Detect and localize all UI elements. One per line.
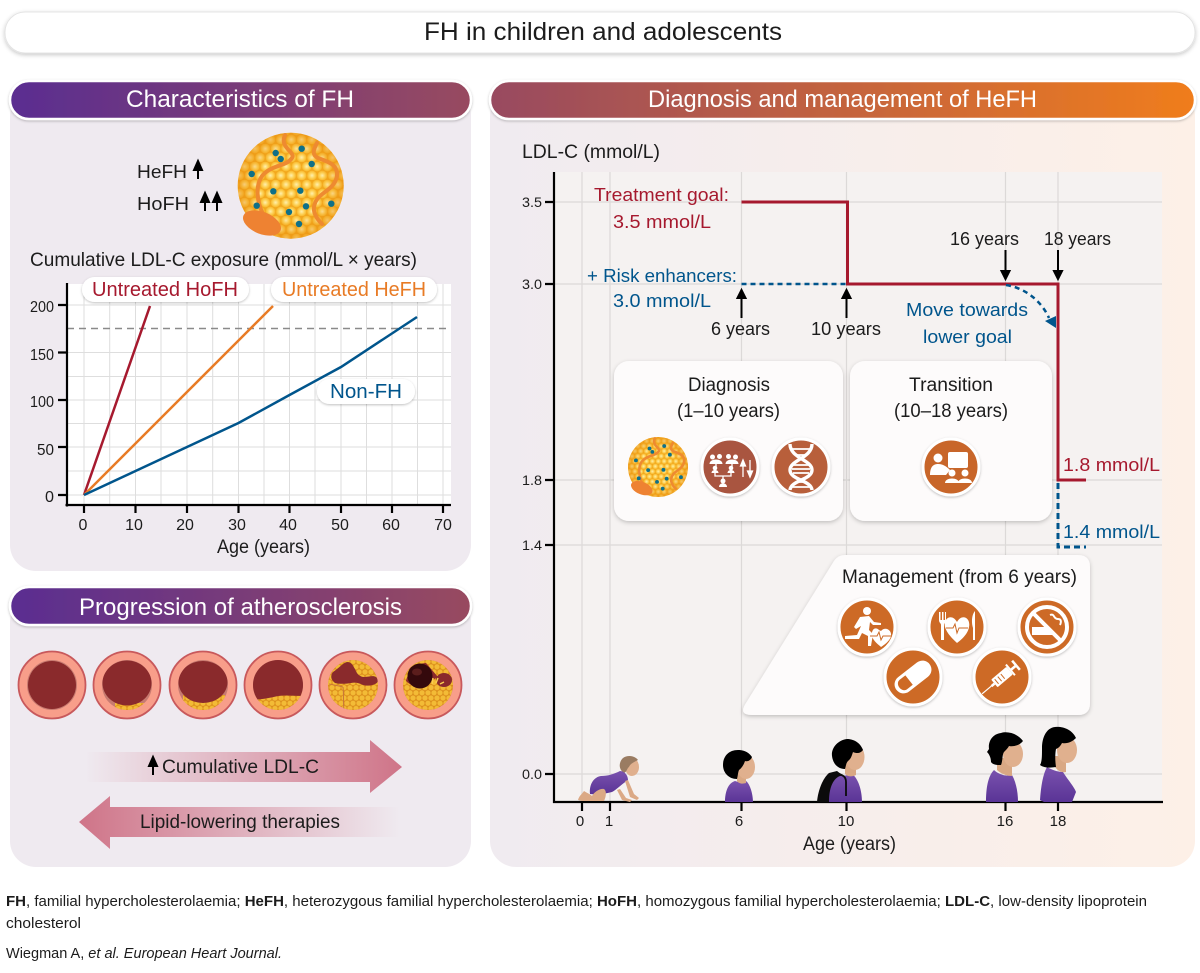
x axis labels: 50	[331, 517, 349, 534]
y axis labels: 50	[37, 442, 54, 459]
x axis labels: 60	[382, 517, 400, 534]
label: treatment goal: 3.5 mmol/L	[613, 211, 711, 232]
illustration: child with backpack, age 10	[817, 739, 864, 802]
panel: transition: (10–18 years)	[894, 401, 1008, 422]
panel: diagnosis: (1–10 years)	[677, 401, 780, 422]
label: non-FH	[317, 379, 415, 404]
label: risk enhancers: 3.0 mmol/L	[613, 290, 711, 311]
footnote: abbreviations: FH, familial hypercholesterolaemia; HeFH, heterozygous familial hypercholesterolaemia; HoFH, homozygous familial hypercholesterolaemia; LDL-C, low-density lipoprotein	[6, 894, 1147, 910]
icon: injection	[974, 649, 1030, 705]
heading: diagnosis and management of HeFH: Diagnosis and management of HeFH	[648, 86, 1037, 113]
chart: cumulative LDL-C exposure	[30, 249, 452, 558]
x axis labels: 10	[838, 813, 854, 830]
x axis labels: 1	[605, 813, 613, 830]
icon: family screening	[702, 439, 758, 495]
y axis labels: 1.8	[522, 472, 542, 488]
y axis title: LDL-C (mmol/L)	[522, 142, 660, 163]
age marker labels: 10 years	[811, 318, 881, 339]
arrows: age markers	[738, 250, 1062, 318]
panel: diagnosis: Diagnosis	[688, 375, 770, 396]
x axis labels: 16	[997, 813, 1013, 830]
label: move towards lower goal	[906, 299, 1028, 347]
y axis labels: 0	[45, 489, 54, 506]
y axis labels	[522, 194, 542, 782]
age marker labels: 6 years	[711, 318, 770, 339]
heading: characteristics of FH: Characteristics of FH	[126, 86, 354, 113]
chart: cumulative LDL-C exposure: Cumulative LDL-C exposure (mmol/L × years)	[30, 249, 417, 271]
label: treatment goal	[594, 184, 729, 232]
LDL-C levels by FH type: HeFH	[137, 161, 187, 182]
label: 1.8 mmol/L: 1.8 mmol/L	[1063, 454, 1160, 475]
x axis title: Age (years)	[803, 834, 896, 855]
footnote: abbreviations: cholesterol	[6, 916, 81, 932]
axes	[545, 172, 1163, 803]
y axis labels: 150	[30, 347, 54, 364]
icon: no smoking	[1019, 599, 1075, 655]
x axis labels: 30	[228, 517, 246, 534]
panel: management	[743, 555, 1090, 715]
panel: characteristics of FH	[10, 81, 471, 571]
y axis labels: 3.5	[522, 194, 542, 210]
line: untreated HoFH	[84, 306, 150, 495]
label: treatment goal: Treatment goal:	[594, 184, 729, 205]
arrow: cumulative LDL-C rising: Cumulative LDL-C	[162, 757, 319, 778]
panel: diagnosis	[614, 361, 843, 521]
icon: exercise	[839, 599, 895, 655]
panel: transition	[850, 361, 1052, 521]
illustration: baby, age 1	[578, 756, 639, 802]
line: lower goal	[1058, 483, 1086, 547]
age marker labels	[711, 228, 1111, 339]
label: non-FH: Non-FH	[330, 381, 402, 403]
panel: progression of atherosclerosis	[10, 587, 471, 867]
y axis labels: 1.4	[522, 537, 542, 553]
panel: management: Management (from 6 years)	[842, 567, 1077, 588]
heading: diagnosis and management of HeFH	[490, 81, 1195, 119]
line: risk enhancer goal	[742, 283, 846, 285]
title bar: FH in children and adolescents	[424, 18, 782, 46]
heading: characteristics of FH	[10, 81, 471, 119]
y axis labels: 100	[30, 394, 54, 411]
arrow: move towards lower goal	[1006, 285, 1056, 328]
x axis labels: 0	[576, 813, 584, 830]
panel: diagnosis and management of HeFH	[490, 81, 1195, 867]
x axis labels: 0	[79, 517, 88, 534]
label: risk enhancers	[587, 265, 737, 311]
x axis title: Age (years)	[217, 536, 310, 558]
footnote: abbreviations	[6, 894, 1147, 932]
artery stage 1	[18, 652, 86, 718]
label: untreated HeFH: Untreated HeFH	[282, 279, 426, 301]
heading: progression of atherosclerosis: Progression of atherosclerosis	[79, 594, 402, 621]
icon: healthy diet	[929, 599, 985, 655]
y axis labels	[30, 299, 54, 506]
x axis labels: 10	[125, 517, 143, 534]
illustration: young adult, age 18	[1040, 727, 1077, 802]
label: move towards lower goal: Move towards	[906, 299, 1028, 320]
artery stage 5	[320, 652, 386, 718]
artery stage 2	[94, 652, 160, 718]
icon: pill	[885, 649, 941, 705]
line: treatment goal	[742, 202, 1086, 480]
icon: LDL particle	[628, 437, 688, 498]
arrow: cumulative LDL-C rising	[85, 740, 402, 793]
artery stage 3	[170, 652, 236, 718]
axes	[58, 283, 451, 513]
LDL-C levels by FH type: HoFH	[137, 193, 189, 214]
x axis labels: 6	[735, 813, 743, 830]
x axis labels: 18	[1050, 813, 1066, 830]
citation: Wiegman A, et al. European Heart Journal.	[6, 946, 282, 962]
icon: LDL particle	[238, 133, 344, 241]
illustration: teenager, age 16	[986, 732, 1023, 802]
arrow: lipid-lowering therapies: Lipid-lowering therapies	[140, 812, 340, 833]
icon: DNA	[773, 439, 829, 495]
heading: progression of atherosclerosis	[10, 587, 471, 625]
chart: LDL-C treatment goals by age	[522, 172, 1163, 855]
y axis labels: 0.0	[522, 766, 542, 782]
title bar	[5, 12, 1195, 53]
artery stage 4	[244, 652, 312, 718]
line: untreated HeFH	[84, 306, 273, 495]
x axis labels: 20	[176, 517, 194, 534]
y axis labels: 3.0	[522, 276, 542, 292]
line: non-FH	[84, 317, 417, 495]
artery stage 6	[394, 652, 462, 718]
y axis labels: 200	[30, 299, 54, 316]
label: 1.4 mmol/L: 1.4 mmol/L	[1063, 521, 1160, 542]
x axis labels: 40	[279, 517, 297, 534]
x axis labels	[79, 517, 452, 534]
label: risk enhancers: + Risk enhancers:	[587, 265, 737, 286]
x axis labels: 70	[434, 517, 452, 534]
illustration: child, age 6	[723, 750, 755, 802]
label: untreated HoFH: Untreated HoFH	[92, 279, 238, 301]
label: move towards lower goal: lower goal	[923, 326, 1012, 347]
panel: transition: Transition	[909, 375, 993, 396]
LDL-C levels by FH type	[137, 161, 221, 214]
artery cross-section stages	[18, 652, 462, 718]
age marker labels: 18 years	[1044, 228, 1111, 249]
icon: teaching session	[923, 439, 979, 495]
x axis labels	[576, 813, 1066, 830]
arrow: lipid-lowering therapies	[79, 796, 400, 849]
age marker labels: 16 years	[950, 228, 1019, 249]
